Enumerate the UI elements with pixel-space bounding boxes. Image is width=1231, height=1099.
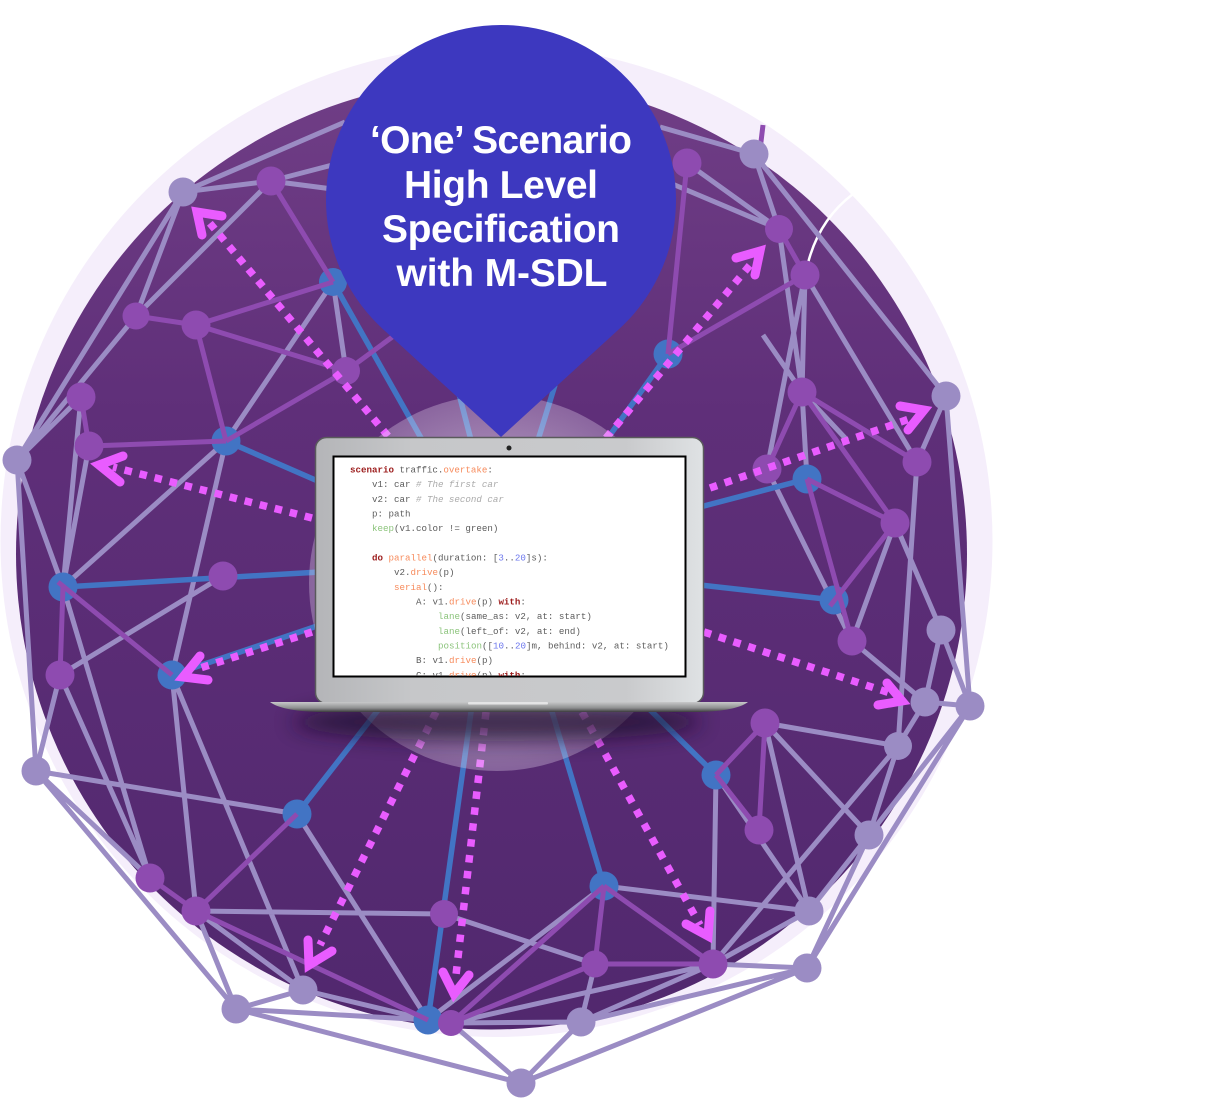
code listing: C: v1.drive(p) with:: [416, 670, 526, 681]
laptop lid: [316, 438, 704, 704]
white arc accent: [808, 194, 853, 263]
laptop: [270, 438, 748, 741]
network nodes: purple: [46, 148, 932, 1036]
bubble heading: High Level: [404, 164, 598, 207]
arrow: lower left: [308, 712, 436, 965]
bubble heading: with M-SDL: [396, 252, 608, 295]
arrow: right lower: [704, 632, 902, 705]
code listing: scenario traffic.overtake:: [350, 464, 493, 476]
laptop shadow: [292, 703, 702, 741]
code listing: position([10..20]m, behind: v2, at: start): [438, 640, 669, 652]
arrow: left upper: [99, 456, 312, 518]
code listing: v2.drive(p): [394, 567, 454, 578]
laptop screen: [334, 456, 686, 676]
dark purple disc: [16, 78, 967, 1030]
code listing: B: v1.drive(p): [416, 655, 493, 666]
code listing: v1: car # The first car: [372, 479, 499, 490]
code listing: A: v1.drive(p) with:: [416, 596, 526, 608]
infographic canvas: [0, 25, 992, 1098]
laptop base: [270, 702, 748, 712]
code listing: do parallel(duration: [3..20]s):: [372, 552, 548, 564]
bubble heading: Specification: [382, 208, 620, 251]
arrow: left lower: [183, 632, 312, 680]
hinge notch: [468, 702, 548, 704]
speech bubble: [326, 25, 676, 437]
code listing: lane(same_as: v2, at: start): [438, 611, 592, 622]
code listing: keep(v1.color != green): [372, 523, 498, 534]
glow behind laptop: [309, 395, 685, 771]
arrow: upper left: [197, 212, 388, 436]
code listing: p: path: [372, 508, 410, 520]
bubble heading: [370, 119, 632, 295]
arrow: upper right: [606, 251, 760, 438]
network nodes: light lavender: [2, 140, 984, 1098]
webcam: [506, 446, 512, 450]
network edges: blue links to laptop: [63, 282, 834, 1020]
code listing: v2: car # The second car: [372, 494, 504, 505]
pale outer disc: [0, 45, 992, 1037]
arrow: lower right: [582, 712, 710, 936]
arrow: bottom: [443, 712, 486, 994]
network nodes: blue: [48, 268, 848, 1034]
arrow: right upper: [710, 406, 924, 488]
code listing: lane(left_of: v2, at: end): [438, 626, 581, 637]
bubble shape: [326, 25, 676, 437]
dotted arrows radiating from laptop: [99, 212, 924, 994]
code listing: [350, 464, 669, 681]
bubble heading: ‘One’ Scenario: [370, 119, 632, 162]
network edges: light lavender: [17, 122, 970, 1083]
code listing: serial():: [394, 582, 443, 593]
network edges: purple: [58, 125, 917, 1023]
